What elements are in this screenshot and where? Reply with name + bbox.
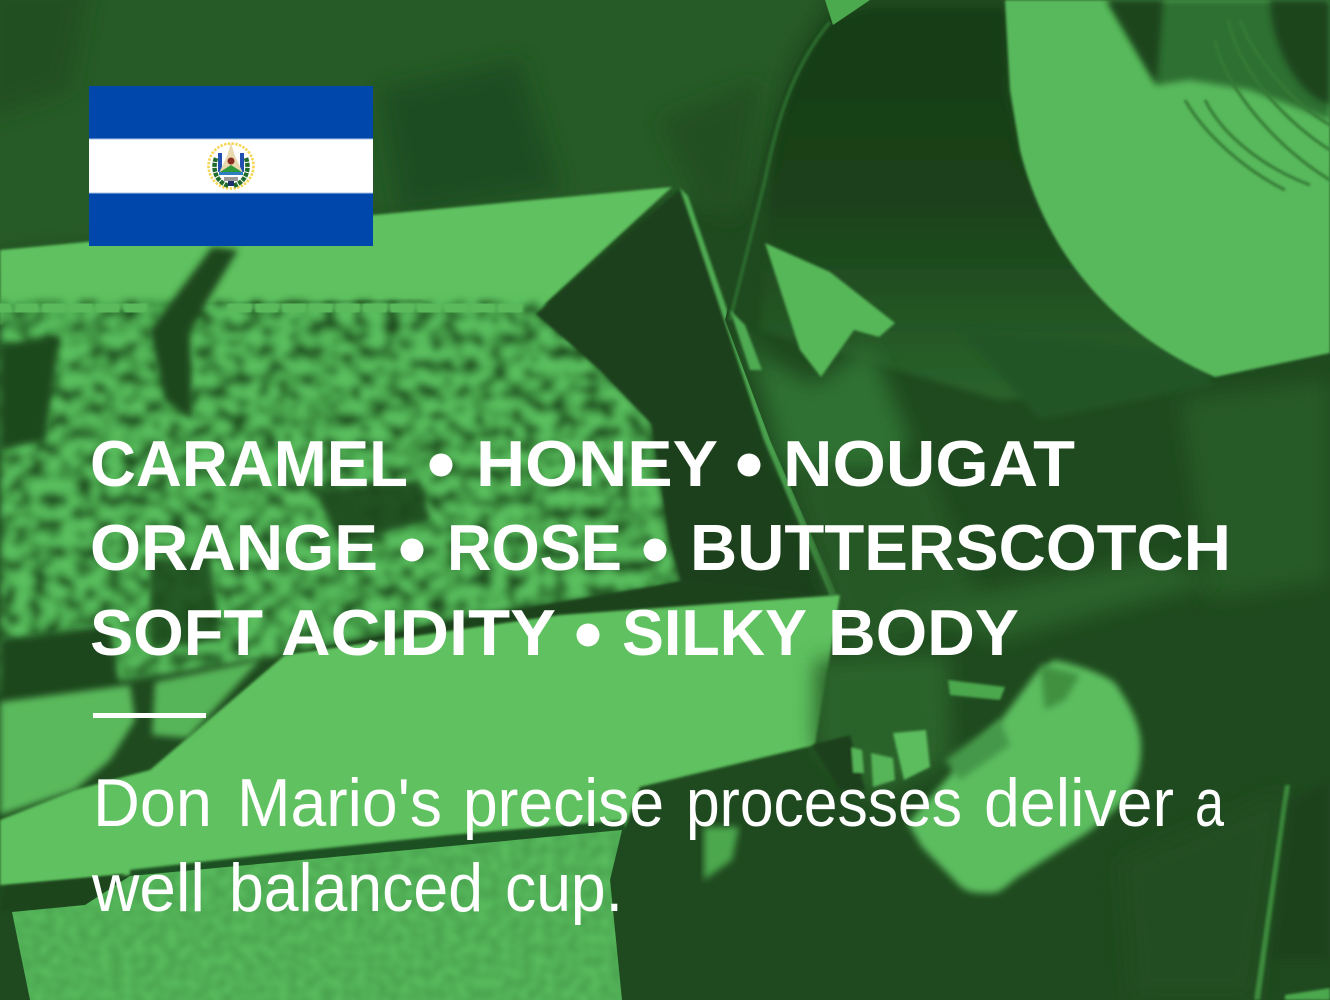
upper light tray edge (0, 187, 672, 325)
line 3 (90, 596, 1019, 669)
description line 2: well (91, 850, 205, 926)
line 3: SILKY (622, 596, 807, 669)
line 1 (90, 427, 1075, 500)
description line 1: precise (463, 765, 664, 841)
description line 1: Don (93, 765, 212, 841)
cherries strip beneath panel (704, 827, 739, 880)
line 2: ORANGE (90, 511, 378, 584)
hopper bright edge (680, 188, 838, 596)
worker head and hair (725, 0, 1330, 600)
line 2 (90, 511, 1231, 584)
face highlight (765, 243, 895, 377)
line 1: CARAMEL (90, 427, 408, 500)
left light block (0, 685, 135, 815)
top left foliage (0, 0, 840, 255)
dark band above lower panel (280, 580, 840, 657)
dark hopper wedge (536, 190, 840, 600)
line 2: BUTTERSCOTCH (690, 511, 1231, 584)
line 2: ROSE (447, 511, 622, 584)
divider rule (93, 713, 206, 718)
line 3: ACIDITY (281, 596, 556, 669)
sleeve line at lower right (1120, 780, 1330, 1000)
description line 1: Mario's (237, 765, 442, 841)
lower face mid tones (745, 330, 910, 470)
line 1: HONEY (476, 427, 718, 500)
coffee cherries (0, 290, 700, 700)
description line 1: deliver (984, 765, 1174, 841)
dark line above mesh (130, 820, 625, 878)
hat (1005, 0, 1330, 377)
line 3: SOFT (90, 596, 263, 669)
description text (91, 765, 1224, 926)
flavor notes heading (90, 427, 1231, 669)
chest and arm mid tones (790, 380, 1330, 660)
description line 1: processes (686, 765, 962, 841)
main lower light panel (0, 595, 840, 885)
description line 1: a (1195, 765, 1224, 841)
description line 2: balanced (229, 850, 483, 926)
mesh bin (0, 820, 640, 1000)
description line 2: cup. (505, 850, 623, 926)
icon: coat of arms (208, 143, 254, 188)
line 1: NOUGAT (783, 427, 1075, 500)
flag of El Salvador (89, 86, 373, 246)
shadows among cherries (0, 247, 430, 705)
hand (812, 655, 1141, 893)
tray scalloped fringe (0, 304, 535, 312)
line 3: BODY (828, 596, 1019, 669)
